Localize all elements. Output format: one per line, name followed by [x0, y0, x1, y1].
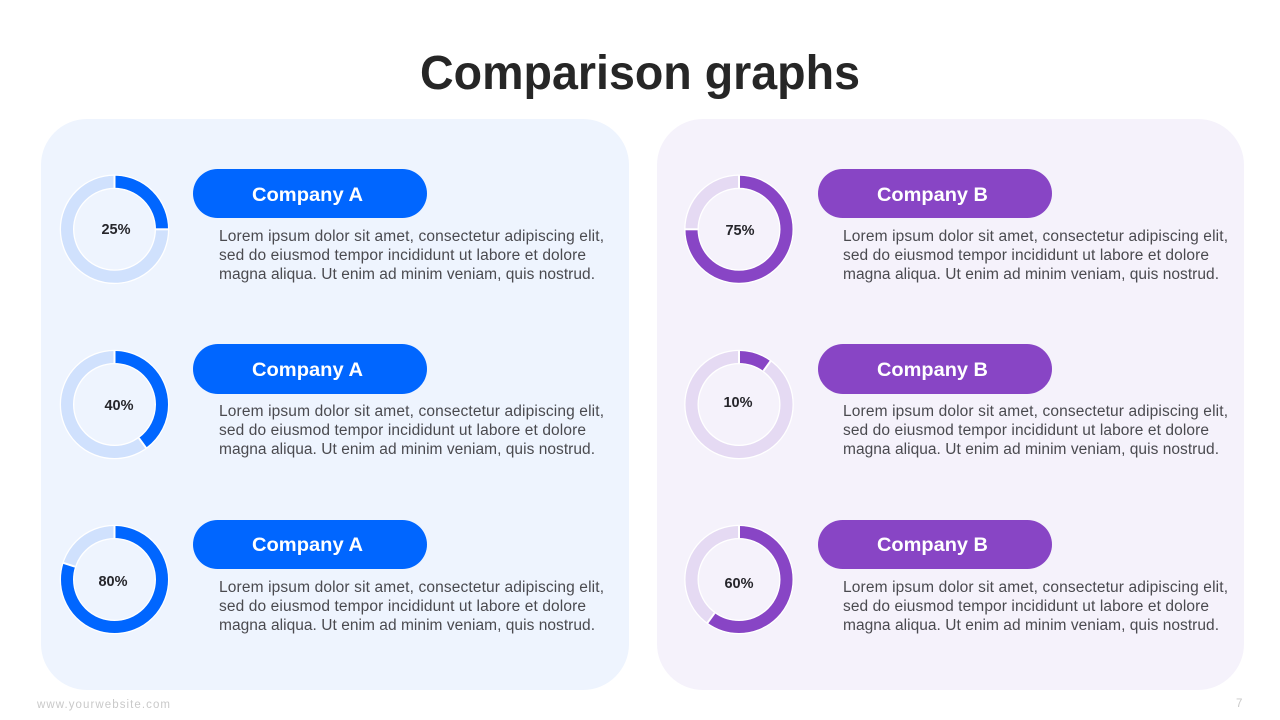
row: Company B 10% — [685, 344, 1228, 458]
donut chart: 40% — [61, 350, 168, 458]
pill heading: Company B — [877, 359, 988, 381]
description: magna aliqua. Ut enim ad minim veniam, quis nostrud. — [843, 266, 1219, 283]
row: Company A 25% — [61, 169, 604, 283]
donut chart: 40%: 40% — [104, 398, 134, 414]
description — [219, 403, 604, 458]
donut chart: 60% — [685, 525, 793, 633]
description: sed do eiusmod tempor incididunt ut labore et dolore — [843, 422, 1209, 439]
row: Company B 60% — [685, 520, 1228, 634]
row: Company B 75% — [685, 169, 1228, 283]
description: sed do eiusmod tempor incididunt ut labore et dolore — [219, 598, 586, 615]
pill heading — [818, 520, 1052, 569]
footer website: www.yourwebsite.com — [36, 699, 170, 711]
donut chart: 10% — [685, 350, 793, 458]
description: magna aliqua. Ut enim ad minim veniam, quis nostrud. — [219, 617, 595, 634]
pill heading — [193, 344, 427, 394]
description: Lorem ipsum dolor sit amet, consectetur adipiscing elit, — [843, 228, 1228, 245]
donut chart: 80%: 80% — [98, 574, 128, 590]
description — [219, 228, 604, 283]
description: magna aliqua. Ut enim ad minim veniam, quis nostrud. — [843, 441, 1219, 458]
pill heading — [818, 344, 1052, 394]
description: magna aliqua. Ut enim ad minim veniam, quis nostrud. — [219, 441, 595, 458]
donut chart: 25% — [61, 175, 169, 283]
description — [219, 579, 604, 634]
donut chart: 75%: 75% — [725, 223, 755, 239]
row: Company A 80% — [61, 520, 604, 634]
pill heading: Company A — [252, 534, 363, 556]
panel: Company B — [657, 119, 1244, 690]
page number: 7 — [1236, 698, 1242, 710]
row: Company A 40% — [61, 344, 604, 458]
description: Lorem ipsum dolor sit amet, consectetur adipiscing elit, — [843, 403, 1228, 420]
description: sed do eiusmod tempor incididunt ut labore et dolore — [219, 247, 586, 264]
description: sed do eiusmod tempor incididunt ut labore et dolore — [219, 422, 586, 439]
description: Lorem ipsum dolor sit amet, consectetur adipiscing elit, — [219, 579, 604, 596]
description — [843, 579, 1228, 634]
donut chart: 60%: 60% — [724, 576, 754, 592]
description: Lorem ipsum dolor sit amet, consectetur adipiscing elit, — [219, 228, 604, 245]
panel: Company A — [41, 119, 629, 690]
pill heading: Company B — [877, 184, 988, 206]
description: magna aliqua. Ut enim ad minim veniam, quis nostrud. — [843, 617, 1219, 634]
description: sed do eiusmod tempor incididunt ut labore et dolore — [843, 247, 1209, 264]
title: Comparison graphs — [420, 47, 860, 100]
donut chart: 25%: 25% — [101, 222, 131, 238]
donut chart: 75% — [685, 175, 793, 283]
donut chart: 80% — [61, 525, 168, 633]
description — [843, 228, 1228, 283]
pill heading: Company A — [252, 359, 363, 381]
description: Lorem ipsum dolor sit amet, consectetur adipiscing elit, — [219, 403, 604, 420]
pill heading: Company B — [877, 534, 988, 556]
donut chart: 10%: 10% — [723, 395, 753, 411]
pill heading — [818, 169, 1052, 218]
description — [843, 403, 1228, 458]
description: sed do eiusmod tempor incididunt ut labore et dolore — [843, 598, 1209, 615]
description: Lorem ipsum dolor sit amet, consectetur adipiscing elit, — [843, 579, 1228, 596]
pill heading — [193, 169, 427, 218]
pill heading: Company A — [252, 184, 363, 206]
description: magna aliqua. Ut enim ad minim veniam, quis nostrud. — [219, 266, 595, 283]
pill heading — [193, 520, 427, 569]
